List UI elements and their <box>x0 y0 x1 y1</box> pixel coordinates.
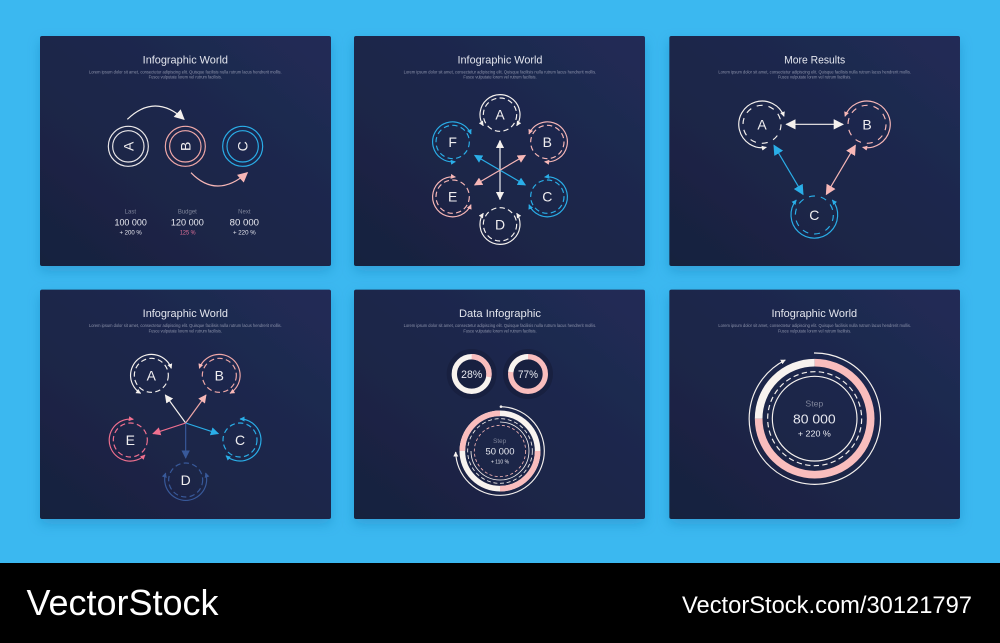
arrow: A to D <box>497 141 503 199</box>
node D <box>165 463 207 500</box>
donut: 77%: 77% <box>518 369 538 381</box>
step ring: Step <box>493 438 507 445</box>
description: Lorem ipsum dolor sit amet, consectetur adipiscing elit. Quisque facilisis nulla rutrum lacus hendrerit mollis. <box>89 323 282 328</box>
stat: next: + 220 % <box>233 231 256 237</box>
step ring: 80 000 <box>793 411 836 426</box>
node A: A <box>495 107 505 123</box>
description: Fusce vulputate lorem vel rutrum facilisis. <box>778 75 851 80</box>
node F <box>433 122 471 162</box>
stat: budget: Budget <box>178 210 197 216</box>
node B <box>845 101 890 148</box>
node A <box>131 354 171 393</box>
stat: next <box>230 210 259 237</box>
arrow: B to C <box>826 145 855 194</box>
node D: D <box>495 216 505 232</box>
stat: next: 80 000 <box>230 217 259 227</box>
step ring <box>749 353 881 484</box>
donut: 77% <box>503 349 553 399</box>
node A: A <box>757 116 767 132</box>
description <box>718 69 911 80</box>
circle A: A <box>120 141 136 151</box>
node D <box>480 208 520 244</box>
footer bar <box>0 563 1000 643</box>
stat: budget <box>171 210 204 237</box>
step ring <box>456 405 544 495</box>
node A <box>480 95 520 131</box>
title: More Results <box>784 54 846 66</box>
logo wordmark: VectorStock <box>26 582 219 623</box>
node E: E <box>448 189 457 205</box>
node F: F <box>448 134 457 150</box>
arrow: centre to E <box>153 423 186 434</box>
arrow: centre to C <box>186 423 218 434</box>
circle C <box>223 126 263 166</box>
node C <box>791 196 838 238</box>
stat: budget: 125 % <box>180 231 196 237</box>
description: Fusce vulputate lorem vel rutrum facilisis. <box>463 75 537 80</box>
node C <box>529 177 567 217</box>
panel: more results triangle <box>669 36 960 266</box>
description: Lorem ipsum dolor sit amet, consectetur adipiscing elit. Quisque facilisis nulla rutrum lacus hendrerit mollis. <box>89 69 282 74</box>
step ring: Step <box>805 398 823 408</box>
node B: B <box>862 116 872 132</box>
step ring: + 220 % <box>798 429 831 439</box>
description: Fusce vulputate lorem vel rutrum facilisis. <box>778 328 851 333</box>
title: Infographic World <box>771 308 857 320</box>
arrow: F to C <box>475 155 525 185</box>
description <box>89 69 282 80</box>
panel: data infographic donuts <box>354 290 645 519</box>
stat: budget: 120 000 <box>171 217 204 227</box>
description: Lorem ipsum dolor sit amet, consectetur adipiscing elit. Quisque facilisis nulla rutrum lacus hendrerit mollis. <box>404 69 596 74</box>
description <box>404 323 596 333</box>
description: Lorem ipsum dolor sit amet, consectetur adipiscing elit. Quisque facilisis nulla rutrum lacus hendrerit mollis. <box>404 323 596 328</box>
stat: last: + 200 % <box>119 231 143 237</box>
description: Fusce vulputate lorem vel rutrum facilisis. <box>149 328 222 333</box>
node A <box>739 101 784 148</box>
donut: 28%: 28% <box>461 369 482 381</box>
donut: 28% <box>447 349 497 399</box>
circle B: B <box>177 142 193 151</box>
node C: C <box>542 189 552 205</box>
node E <box>109 419 147 461</box>
stat: last: 100 000 <box>114 217 147 227</box>
description <box>89 323 282 333</box>
stat: last: Last <box>125 210 136 216</box>
node B: B <box>215 367 224 383</box>
step ring: + 110 % <box>491 459 509 465</box>
title: Infographic World <box>457 54 542 66</box>
image id: VectorStock.com/30121797 <box>682 592 972 619</box>
circle C: C <box>235 141 251 151</box>
panel: five nodes radiating from a centre <box>40 290 331 519</box>
node E <box>433 177 471 217</box>
node C: C <box>235 432 245 448</box>
description: Lorem ipsum dolor sit amet, consectetur adipiscing elit. Quisque facilisis nulla rutrum lacus hendrerit mollis. <box>718 69 911 74</box>
arrow: A to B <box>786 123 843 126</box>
description: Fusce vulputate lorem vel rutrum facilisis. <box>149 75 222 80</box>
title: Data Infographic <box>459 308 542 320</box>
step ring: 50 000 <box>485 446 514 456</box>
arrow: B to C <box>191 173 247 186</box>
description: Fusce vulputate lorem vel rutrum facilisis. <box>463 328 537 333</box>
arrow: A to B <box>127 106 184 119</box>
description <box>404 69 596 80</box>
description <box>718 323 911 333</box>
title: Infographic World <box>143 308 228 320</box>
circle B <box>165 126 205 166</box>
panel: three linked circles with budget figures <box>40 36 331 266</box>
node C <box>223 419 261 461</box>
description: Lorem ipsum dolor sit amet, consectetur adipiscing elit. Quisque facilisis nulla rutrum lacus hendrerit mollis. <box>718 323 911 328</box>
node A: A <box>147 367 157 383</box>
panel: six nodes with crossing arrows <box>354 36 645 266</box>
stat: next: Next <box>238 210 251 216</box>
arrow: E to B <box>475 155 525 185</box>
node D: D <box>181 472 191 488</box>
arrow: centre to A <box>165 395 186 423</box>
node E: E <box>126 432 135 448</box>
panel: large step ring <box>669 290 960 519</box>
node C: C <box>809 207 819 223</box>
circle A <box>108 126 148 166</box>
title: Infographic World <box>143 54 228 66</box>
node B <box>199 354 240 393</box>
arrow: centre to B <box>186 395 206 423</box>
arrow: centre to D <box>184 423 187 458</box>
node B <box>529 122 567 162</box>
stat: last <box>114 210 147 237</box>
node B: B <box>543 134 552 150</box>
arrow: A to C <box>774 145 803 194</box>
